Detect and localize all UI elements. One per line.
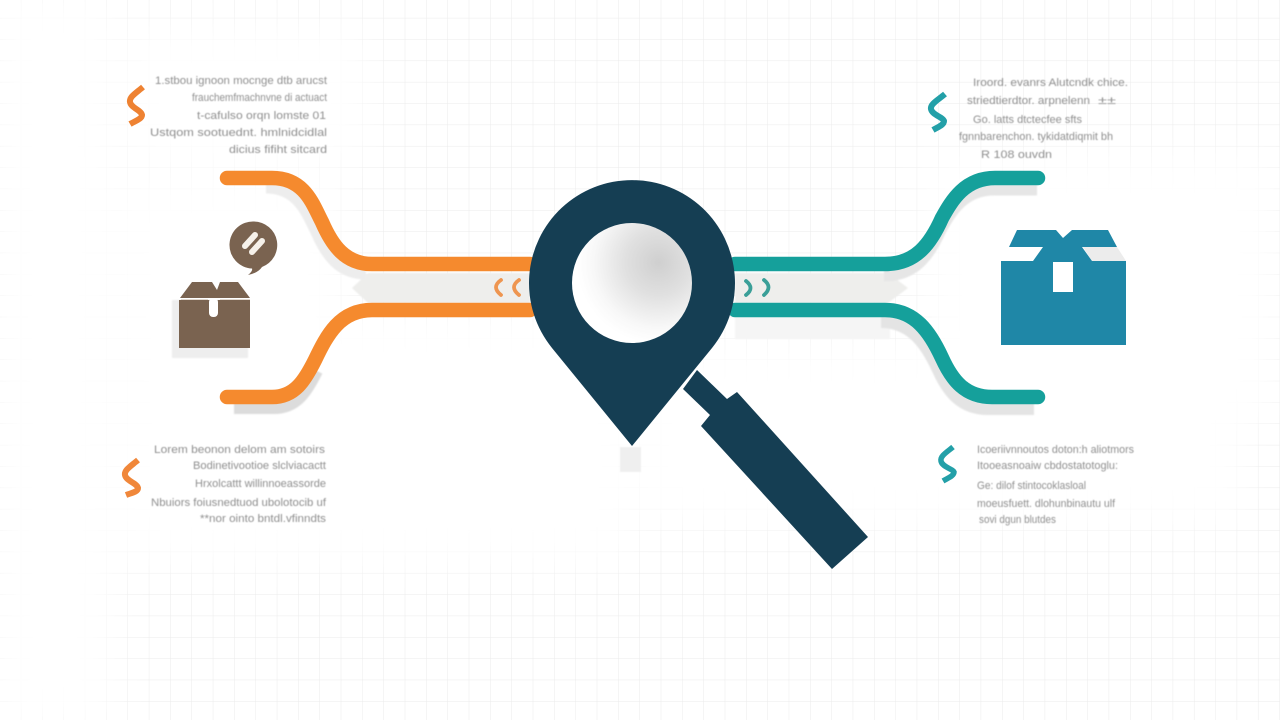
orange connector lines bbox=[227, 178, 530, 397]
orange chevrons bbox=[496, 280, 519, 295]
text block: top left: Ustqom sootuednt. hmlnidcidlal bbox=[150, 127, 327, 139]
text block: top left: dicius fifiht sitcard bbox=[229, 144, 327, 156]
text block: top right: ±± bbox=[1098, 95, 1116, 107]
text block: top right: R 108 ouvdn bbox=[981, 149, 1052, 161]
text block: bottom right: Icoeriivnnoutos doton:h aliotmors bbox=[977, 444, 1134, 456]
text block: bottom left: **nor ointo bntdl.vfinndts bbox=[200, 513, 327, 525]
connector shadow band: left bbox=[234, 188, 530, 408]
connector shadow band: right bbox=[735, 190, 1037, 409]
text block: top right bbox=[959, 77, 1128, 161]
magnifier handle bbox=[683, 370, 868, 569]
teal chevrons bbox=[746, 280, 768, 295]
text block: bottom left: Lorem beonon delom am sotoirs bbox=[154, 444, 326, 456]
magnifier pin icon bbox=[529, 180, 868, 569]
text block: bottom right: Itooeasnoaiw cbdostatotoglu: bbox=[977, 460, 1118, 472]
lens bbox=[572, 223, 692, 343]
icon: orange squiggle top bbox=[130, 87, 143, 124]
text block: bottom left: Nbuiors foiusnedtuod ubolotocib uf bbox=[151, 497, 327, 509]
icon: brown box bbox=[179, 282, 250, 348]
icon: teal squiggle top bbox=[931, 94, 945, 130]
text block: top right: Iroord. evanrs Alutcndk chice. bbox=[973, 77, 1128, 89]
text block: bottom left: Hrxolcattt willinnoeassorde bbox=[195, 478, 326, 490]
text block: bottom right: Ge: dilof stintocoklasloal bbox=[977, 480, 1086, 492]
text block: bottom left bbox=[151, 444, 327, 525]
brown box shadow bbox=[172, 300, 248, 358]
text block: bottom right bbox=[977, 444, 1134, 526]
text block: top left: frauchemfmachnvne di actuact bbox=[192, 92, 327, 104]
text block: bottom left: Bodinetivootioe slclviacactt bbox=[193, 460, 326, 472]
icon: orange squiggle bottom bbox=[125, 460, 138, 495]
text block: bottom right: sovi dgun blutdes bbox=[979, 514, 1056, 526]
text block: top right: striedtierdtor. arpnelenn bbox=[967, 95, 1090, 107]
pin body bbox=[529, 180, 735, 446]
text block: top right: fgnnbarenchon. tykidatdiqmit bh bbox=[959, 131, 1113, 143]
text block: top left: 1.stbou ignoon mocnge dtb arucst bbox=[155, 75, 327, 87]
text block: top right: Go. latts dtctecfee sfts bbox=[973, 114, 1082, 126]
icon: teal squiggle bottom bbox=[941, 447, 954, 481]
text block: top left bbox=[150, 75, 327, 156]
teal connector lines bbox=[735, 178, 1038, 397]
icon: speech bubble bbox=[229, 221, 277, 275]
text block: bottom right: moeusfuett. dlohunbinautu ulf bbox=[977, 498, 1116, 510]
pin tip shadow bbox=[620, 447, 641, 472]
icon: teal box bbox=[1001, 230, 1126, 345]
text block: top left: t-cafulso orqn lomste 01 bbox=[197, 110, 326, 122]
